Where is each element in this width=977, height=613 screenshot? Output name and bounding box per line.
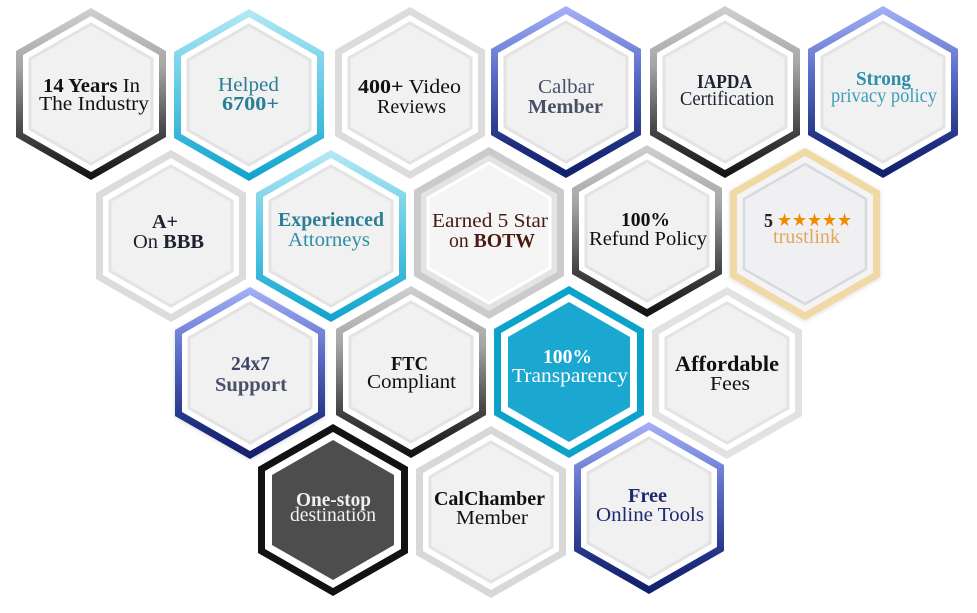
hexagon: 100% Refund Policy: Refund Policy [589,228,707,250]
hexagon: Strong privacy policy [808,6,958,178]
hexagon: 14 Years In The Industry: 14 Years In [43,75,140,97]
hexagon: Experienced Attorneys: Experienced [278,209,384,231]
hexagon: Strong privacy policy: privacy policy [831,85,937,107]
hexagon: 5 stars trustlink: trustlink [773,226,840,248]
hexagon: A+ On BBB: On BBB [133,231,204,253]
hexagon: CalChamber Member: Member [456,507,528,529]
hexagon: CalChamber Member: CalChamber [434,488,545,510]
hexagon: Calbar Member [491,6,641,178]
hexagon: 5 stars trustlink: 5 [764,210,773,232]
hexagon: 100% Transparency: 100% [543,346,592,368]
hexagon: 24x7 Support: 24x7 [231,353,270,375]
hexagon: Helped 6700+ [174,9,324,181]
hexagon: Affordable Fees: Fees [710,373,750,395]
hexagon: Helped 6700+: Helped [218,74,279,96]
hexagon: Earned 5 Star on BOTW: on BOTW [449,230,535,252]
hexagon: Helped 6700+: 6700+ [222,93,279,115]
hexagon: Earned 5 Star on BOTW [414,147,564,319]
hexagon: 400+ Video Reviews: 400+ Video [358,76,461,98]
hexagon: One-stop destination: One-stop [296,489,371,511]
hexagon: Free Online Tools: Online Tools [596,504,704,526]
hexagon: 5 stars trustlink [730,148,880,320]
hexagon: 14 Years In The Industry [16,8,166,180]
hexagon: Free Online Tools: Free [628,485,667,507]
hexagon: 24x7 Support [175,287,325,459]
hexagon: 400+ Video Reviews: Reviews [377,96,446,118]
hexagon: Calbar Member: Calbar [538,76,594,98]
hexagon: 100% Transparency [494,286,644,458]
hexagon: Free Online Tools [574,422,724,594]
hexagon: IAPDA Certification: IAPDA [697,71,752,93]
hexagon: IAPDA Certification [650,6,800,178]
hexagon: 100% Refund Policy: 100% [621,209,670,231]
hexagon: FTC Compliant: Compliant [367,371,456,393]
hexagon: Experienced Attorneys: Attorneys [288,229,370,251]
hexagon: FTC Compliant: FTC [391,353,428,375]
hexagon: IAPDA Certification: Certification [680,88,774,110]
hexagon: Strong privacy policy: Strong [856,68,911,90]
hexagon: A+ On BBB [96,150,246,322]
hexagon: One-stop destination: destination [290,504,376,526]
icon: five stars: ★★★★★ [777,210,852,231]
hexagon: Earned 5 Star on BOTW: Earned 5 Star [432,210,548,232]
hexagon: 100% Refund Policy [572,145,722,317]
hexagon: A+ On BBB: A+ [152,211,178,233]
hexagon: One-stop destination [258,424,408,596]
hexagon: 14 Years In The Industry: The Industry [39,93,149,115]
hexagon: Calbar Member: Member [528,96,603,118]
hexagon: Affordable Fees: Affordable [675,351,779,376]
hexagon: 24x7 Support: Support [215,374,287,396]
hexagon: 100% Transparency: Transparency [512,365,628,387]
hexagon: Experienced Attorneys [256,150,406,322]
hexagon: CalChamber Member [416,426,566,598]
hexagon: 400+ Video Reviews [335,7,485,179]
hexagon: Affordable Fees [652,287,802,459]
hexagon: FTC Compliant [336,286,486,458]
